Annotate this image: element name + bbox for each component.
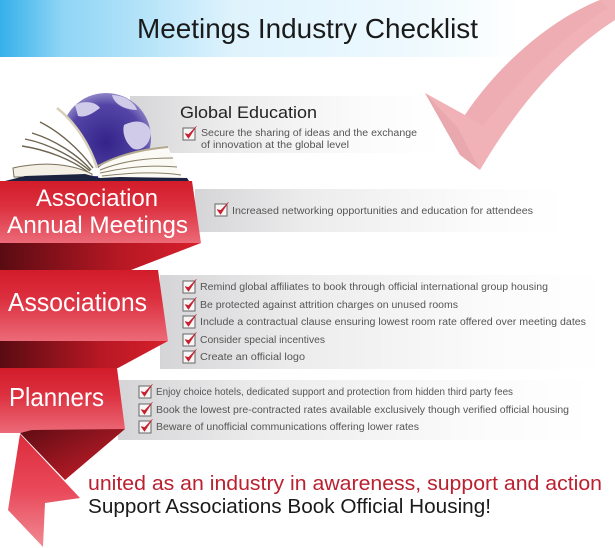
checkboxes <box>183 279 196 363</box>
icon: large pink checkmark <box>425 0 615 170</box>
panel: associations list <box>160 275 605 369</box>
text: global education item <box>201 128 417 151</box>
ribbon: planners <box>0 368 125 547</box>
panel: association annual meetings list <box>195 189 565 232</box>
header banner <box>0 0 520 57</box>
icon: checkbox <box>183 126 196 140</box>
panel: global education <box>130 96 442 153</box>
slogan: united as an industry in awareness, support and action <box>88 473 602 495</box>
ribbon: association annual meetings: Association <box>36 185 158 212</box>
panel: planners list <box>118 380 593 440</box>
list text: Beware of unofficial communications offering lower rates <box>156 422 419 433</box>
ribbon: associations <box>0 270 168 368</box>
heading: global education: Global Education <box>180 104 317 122</box>
title: Meetings Industry Checklist <box>137 13 478 44</box>
text: global education item: Secure the sharing of ideas and the exchange <box>201 128 417 139</box>
icon: globe and open book <box>5 93 189 183</box>
list text: Remind global affiliates to book through official international group housing <box>200 282 548 293</box>
list text: Create an official logo <box>200 352 305 363</box>
list text: Be protected against attrition charges on unused rooms <box>200 300 458 311</box>
ribbon: association annual meetings: Annual Meetings <box>7 212 188 239</box>
text: meetings item: Increased networking opportunities and education for attendees <box>232 206 533 217</box>
text: global education item: of innovation at the global level <box>201 140 349 151</box>
list text: Enjoy choice hotels, dedicated support and protection from hidden third party fees <box>156 387 513 398</box>
ribbon: association annual meetings <box>0 181 201 270</box>
list text: Include a contractual clause ensuring lowest room rate offered over meeting dates <box>200 317 586 328</box>
ribbon: associations: Associations <box>8 287 147 317</box>
slogan: Support Associations Book Official Housing! <box>88 496 491 518</box>
slogan <box>88 473 602 518</box>
list text: Book the lowest pre-contracted rates available exclusively though verified official housing <box>156 405 569 416</box>
list text <box>200 282 586 363</box>
checkboxes <box>139 384 152 433</box>
list text: Consider special incentives <box>200 335 325 346</box>
icon: checkbox <box>215 202 228 216</box>
ribbon: planners: Planners <box>9 382 104 412</box>
list text <box>156 387 569 433</box>
ribbon tail <box>8 434 80 547</box>
